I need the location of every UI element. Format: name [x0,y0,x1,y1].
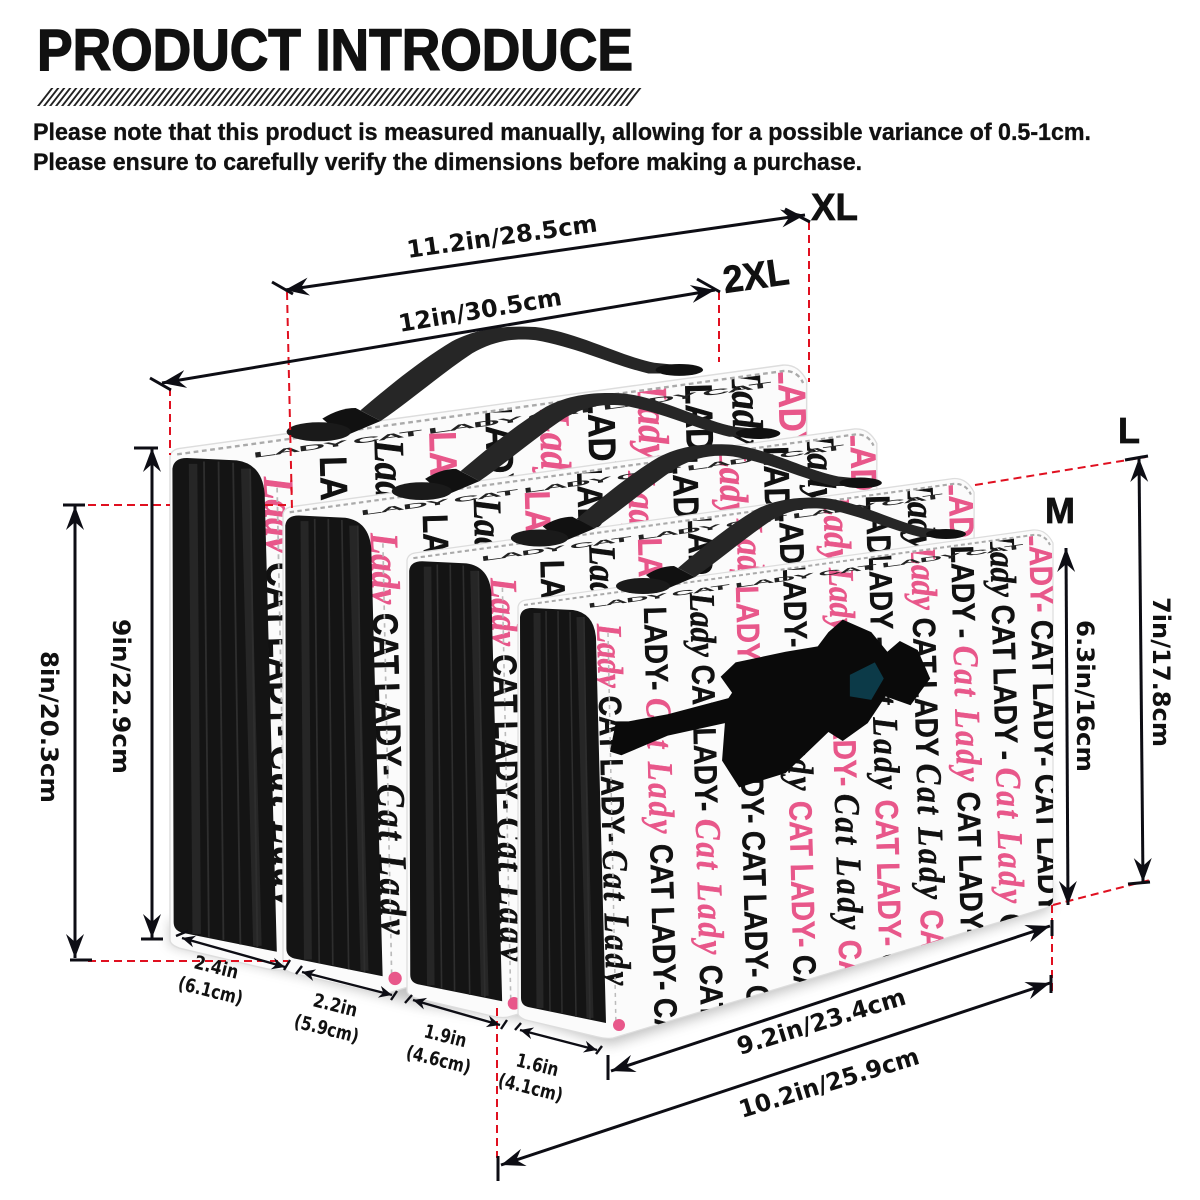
M printed pattern: LADY- CAT LADY- CAT LADY-C [1022,528,1068,941]
2XL printed pattern: LADY- CAT LADY- CAT LADY- CAT [516,490,569,996]
2XL printed pattern: Lady CAT LADY- Cat Lady CAT [619,469,675,946]
L handle [511,444,882,546]
dimension: thickness M [496,1023,602,1107]
M printed pattern [596,536,1053,1024]
L printed pattern: Lady CAT LADY- Cat Lady CAT [581,544,635,999]
L printed pattern: LADY- CAT LADY- CAT LADY- CAT [631,537,682,1020]
2XL flattened print on top edge: LADY CAT LADY CAT LADY CAT [360,443,845,517]
2XL printed pattern: LADY- CAT LADY- CAT LADY-C [842,427,893,885]
2XL printed pattern: LADY- Cat Lady CAT LADY- CAT [568,466,624,962]
measurement note: Please note that this product is measured manually, allowing for a possible variance of 0.5-1cm. [33,119,1091,146]
size label M: M [1045,490,1075,531]
M pink corner [613,1019,625,1031]
2XL printed pattern: LADY - Cat Lady CAT LADY-C [754,446,810,905]
dimension: 2XL length: 12in/30.5cm [396,283,564,338]
2XL handle [392,393,780,500]
measurement note: Please ensure to carefully verify the dimensions before making a purchase. [33,149,862,176]
XL printed pattern: Lady CAT LADY- Cat Lady [254,475,314,911]
dimension: thickness 2XL: (5.9cm) [292,1011,361,1048]
XL printed pattern: LADY - Cat Lady CAT LADY- CAT [578,393,640,936]
M printed pattern: Lady CAT LADY- Cat Lady CAT [681,591,732,1020]
L printed pattern: Lady CAT LADY Cat Lady CAT [815,494,869,940]
L side stitching [502,588,511,1006]
M printed pattern: Lady CAT LADY- Cat Lady CAT [820,566,871,995]
2XL printed pattern: Lady CAT LADY- Cat Lady [361,531,415,938]
2XL printed pattern: Lady CAT LADY- Cat Lady CAT [464,497,520,973]
L top stitching [413,484,971,558]
XL printed pattern: Lady CAT LADY - Cat Lady CAT [722,367,784,888]
2XL top stitching [290,434,874,512]
L printed pattern: Lady CAT LADY - Cat Lady CAT [899,480,954,945]
dimension: M height: 6.3in/16cm [1071,620,1099,772]
XL printed pattern: Lady CAT LADY- Cat Lady CAT [365,438,426,949]
L bag body [407,479,974,1017]
title: PRODUCT INTRODUCE [37,18,633,83]
dimension: M depth: 9.2in/23.4cm [734,983,909,1061]
M printed pattern: LADY - Cat Lady CAT LADY- CAT [860,553,912,1009]
dimension: thickness XL [176,931,290,1010]
XL printed pattern: LADY - Cat Lady CAT LADY-C [676,383,737,875]
dimension: thickness M: 1.6in [514,1050,561,1081]
2XL printed pattern: Lady CAT LADY Cat Lady CAT [710,445,766,912]
dimension: 2XL height [35,505,92,960]
L printed pattern: LADY- CAT LADY- CAT LADY-C [941,477,991,914]
XL printed pattern: LADY- CAT LADY- CAT LADY- CAT [421,431,478,973]
2XL printed pattern: Lady CAT LADY - Cat Lady CAT [797,430,854,916]
2XL printed pattern: LADY - Cat Lady CAT LADY- CAT [663,455,720,961]
L flattened print on top edge: LADY CAT LADY CAT LADY CAT [480,492,944,563]
XL printed pattern: LADY- Cat Lady CAT LADY- CAT [310,456,372,988]
dimension: XL length [272,209,810,294]
XL printed pattern [264,372,806,903]
L printed pattern: LADY- Cat Lady CAT LADY- CAT [532,559,587,1034]
size label XL: XL [811,187,858,229]
2XL printed pattern: LADY- Cat Lady CAT LADY- CAT [413,514,470,1010]
character silhouette printed on bag [610,620,930,787]
dimension: XL height [107,448,163,939]
XL zipper end [172,458,277,952]
M zipper end [520,608,606,1023]
bag: L [407,444,991,1034]
M printed pattern: LADY- Cat Lady CAT LADY- CAT [635,606,687,1054]
XL printed pattern: Lady CAT LADY Cat Lady CAT [628,382,689,883]
dimension: XL depth [498,975,1051,1181]
2XL zipper end [285,516,383,976]
dimension: M depth [608,920,1052,1080]
XL side stitching [277,488,287,958]
dimension: XL height: 9in/22.9cm [107,619,135,774]
dimension: L height [1125,456,1175,884]
XL bag body [170,365,807,970]
M bag body [518,530,1053,1038]
size label L: L [1118,410,1140,451]
L pink corner [508,997,520,1010]
M top stitching [524,535,1050,605]
dimension: thickness XL: (6.1cm) [176,973,245,1010]
size label 2XL: 2XL [720,251,792,302]
M printed pattern: Lady CAT LADY- Cat Lady [588,622,637,989]
bag: XL [170,327,825,988]
dimension: XL length: 11.2in/28.5cm [405,209,599,264]
dimension: thickness L [404,995,507,1079]
ground shadow [170,880,1050,1045]
L printed pattern [490,485,974,962]
dimension: thickness 2XL [292,966,397,1048]
L zipper end [409,561,502,1001]
XL pink corner [283,947,297,961]
M printed pattern: LADY- Cat Lady CAT LADY- CAT [774,563,826,1011]
M printed pattern: LADY- CAT LADY- CAT LADY- CAT [729,585,776,1041]
dimension: thickness L: (4.6cm) [404,1042,473,1079]
XL printed pattern: LADY- Cat Lady CAT LADY- CAT [476,405,538,937]
2XL printed pattern [370,436,876,935]
XL handle [287,327,703,441]
dimension: thickness 2XL: 2.2in [311,990,360,1022]
dimension: 2XL height: 8in/20.3cm [35,651,63,803]
2XL pink corner [388,972,402,985]
measurement note [33,119,1091,176]
M printed pattern: Lady CAT LADY Cat Lady CAT [902,544,953,965]
L printed pattern: LADY- Cat Lady CAT LADY- CAT [679,514,734,989]
dimension: thickness XL: 2.4in [192,952,241,984]
L printed pattern: LADY - Cat Lady CAT LADY-C [857,495,912,933]
2XL bag body [283,429,877,993]
M handle [616,498,966,594]
M printed pattern: LADY - Cat Lady CAT LADY-C [942,545,993,959]
dimension: XL depth: 10.2in/25.9cm [736,1042,923,1124]
dimension: L height: 7in/17.8cm [1147,597,1175,747]
M side stitching [608,633,616,1028]
M flattened print on top edge: LADY CAT LADY CAT LADY CAT [587,543,1024,609]
red dashed guide lines [75,222,1150,1158]
L printed pattern: Lady CAT LADY- Cat Lady [482,576,535,965]
M printed pattern: Lady CAT LADY - Cat Lady CAT [981,531,1032,969]
L printed pattern: LADY - Cat Lady CAT LADY- CAT [771,503,826,987]
dimension: thickness L: 1.9in [422,1021,469,1052]
XL top stitching [177,371,803,454]
XL printed pattern: LADY- CAT LADY- CAT LADY-C [770,363,825,854]
hatched title underline [44,88,638,106]
dimension: 2XL length [150,279,720,390]
bag: M [518,498,1068,1054]
dimension: thickness M: (4.1cm) [496,1070,565,1107]
XL flattened print on top edge: LADY CAT LADY CAT LADY CAT [252,380,773,460]
bag: 2XL [283,393,893,1010]
XL printed pattern: Lady CAT LADY- Cat Lady CAT [530,408,592,919]
2XL side stitching [383,543,392,982]
L printed pattern: Lady CAT LADY- Cat Lady CAT [728,517,783,972]
